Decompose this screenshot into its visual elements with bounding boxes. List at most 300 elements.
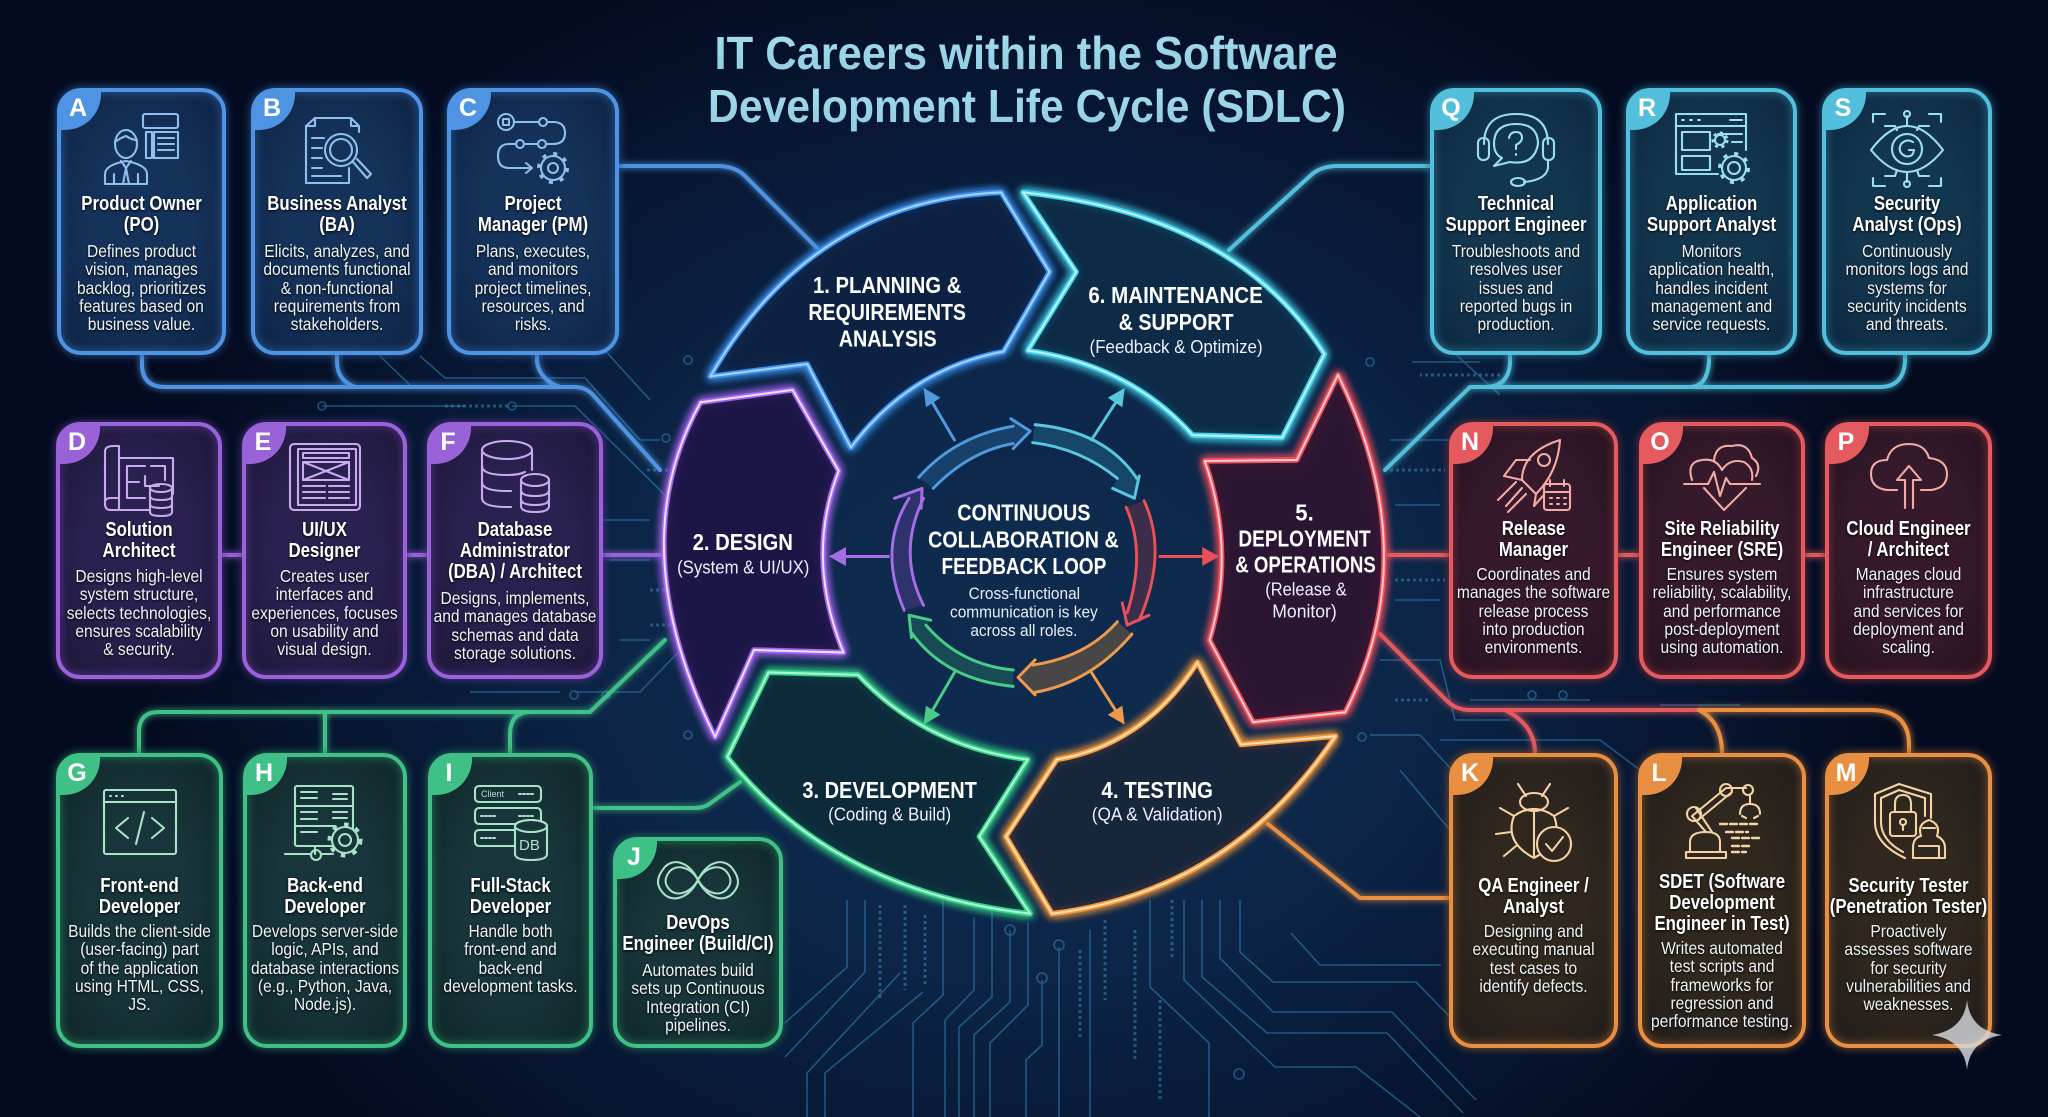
role title — [102, 518, 176, 562]
text — [76, 192, 207, 334]
role title: Engineer in Test) — [1654, 912, 1790, 935]
stage 6: maintenance and support — [1023, 192, 1324, 438]
icon: robot arm — [1682, 782, 1762, 862]
badge H: H — [255, 759, 273, 787]
card N: Release Manager — [1449, 422, 1618, 679]
role title — [80, 192, 203, 238]
badge S — [1825, 91, 1866, 130]
text — [443, 874, 578, 997]
role title: Front-end — [100, 874, 179, 897]
badge O — [1642, 425, 1683, 464]
role description: test cases to — [1490, 958, 1577, 978]
card D: Solution Architect — [56, 422, 222, 679]
role description: systems for — [1867, 278, 1947, 298]
card B: Business Analyst — [251, 88, 423, 355]
role description: experiences, focuses — [251, 603, 398, 623]
role description: regression and — [1670, 993, 1774, 1013]
role title — [266, 192, 408, 238]
role description — [631, 960, 765, 1036]
text — [1826, 193, 1988, 333]
role title: Site Reliability — [1665, 517, 1779, 540]
role title: (Penetration Tester) — [1830, 895, 1987, 918]
icon: devops infinity loop — [656, 861, 740, 900]
stage 2: design: (System & UI/UX) — [677, 556, 809, 577]
role description: Designs, implements, — [441, 588, 589, 608]
role title: Project — [505, 192, 561, 215]
role description: development tasks. — [443, 976, 578, 996]
text — [1642, 871, 1802, 1030]
role title — [478, 192, 589, 238]
role description: requirements from — [274, 296, 400, 316]
role description: reported bugs in — [1460, 296, 1572, 316]
role description — [76, 241, 207, 334]
role description: resolves user — [1470, 259, 1562, 279]
role description: identify defects. — [1479, 976, 1588, 996]
role description: service requests. — [1653, 314, 1770, 334]
badge E — [245, 425, 286, 464]
role description: back-end — [478, 958, 543, 978]
role description: issues and — [1479, 278, 1553, 298]
role description: test scripts and — [1670, 956, 1774, 976]
icon: eye monitoring — [1867, 108, 1947, 188]
stage 2: design — [664, 390, 844, 737]
role description — [1616, 565, 1828, 656]
role title — [448, 518, 583, 584]
role description — [1802, 565, 2015, 656]
text — [474, 192, 592, 334]
role description: (e.g., Python, Java, — [258, 976, 392, 996]
text — [66, 518, 211, 660]
badge K — [1452, 756, 1493, 795]
role title: Full-Stack — [470, 874, 551, 897]
card I: Full-Stack Developer — [428, 753, 593, 1048]
role description — [1603, 242, 1820, 333]
role description — [474, 241, 592, 334]
badge N: N — [1461, 428, 1479, 456]
role title: Back-end — [287, 874, 363, 897]
role title: Administrator — [460, 539, 570, 562]
role description — [250, 566, 398, 660]
text — [1453, 875, 1614, 995]
icon: stack and database — [474, 785, 548, 861]
role description: executing manual — [1472, 939, 1595, 959]
role title — [288, 518, 362, 564]
badge B: B — [263, 94, 281, 122]
icon: heart pulse cloud — [1682, 434, 1762, 514]
role description: monitors logs and — [1846, 259, 1968, 279]
badge D: D — [68, 428, 86, 456]
role description — [1426, 565, 1641, 656]
role title: Engineer (SRE) — [1661, 538, 1783, 561]
stage 3: development — [727, 672, 1030, 914]
role description: frameworks for — [1671, 975, 1773, 995]
role description: selects technologies, — [67, 603, 211, 623]
role description: manages the software — [1457, 582, 1610, 602]
badge A: A — [69, 94, 87, 122]
role description: management and — [1651, 296, 1772, 316]
role description: Plans, executes, — [476, 241, 590, 261]
role description: weaknesses. — [1863, 994, 1954, 1014]
text — [1643, 518, 1801, 656]
role title: SDET (Software — [1659, 870, 1785, 893]
text — [68, 874, 211, 1014]
role description — [1799, 242, 2015, 333]
role description: Ensures system — [1667, 564, 1777, 584]
role description: for security — [1870, 958, 1947, 978]
role description — [443, 921, 578, 997]
role description: handles incident — [1655, 278, 1768, 298]
role description: and services for — [1854, 601, 1963, 621]
stage 5: deployment and operations — [1205, 375, 1384, 722]
card J: DevOps Engineer — [613, 837, 783, 1048]
arrow: red loop — [1122, 501, 1155, 625]
arrow: green loop — [909, 615, 1013, 686]
text — [1829, 518, 1988, 656]
role title: Security Tester — [1848, 874, 1969, 897]
stage 6: maintenance and support: (Feedback & Optimize) — [1090, 336, 1263, 357]
arrow: orange loop — [1018, 622, 1132, 695]
badge E: E — [255, 428, 271, 456]
stage 5: deployment and operations: & OPERATIONS — [1235, 552, 1376, 577]
role description: and manages database — [434, 606, 596, 626]
role description: interfaces and — [276, 584, 373, 604]
badge L — [1641, 756, 1682, 795]
badge A — [60, 91, 101, 130]
role title: Release — [1502, 517, 1565, 540]
role title: Solution — [105, 518, 173, 541]
role description: stakeholders. — [291, 314, 383, 334]
role title: (DBA) / Architect — [448, 560, 582, 583]
badge J: J — [627, 843, 641, 871]
role title: Analyst — [1503, 895, 1564, 918]
role description: risks. — [515, 314, 551, 334]
role title: Database — [478, 518, 552, 541]
role description: project timelines, — [475, 278, 591, 298]
icon: process route with gear — [496, 113, 569, 184]
feedback loop arrows — [892, 419, 1155, 695]
badge B — [254, 91, 295, 130]
role description: Develops server-side — [252, 921, 398, 941]
role title: (PO) — [124, 213, 159, 236]
title: IT Careers within the Software — [714, 27, 1338, 79]
role description: security incidents — [1847, 296, 1967, 316]
role title: Technical — [1478, 192, 1554, 215]
icon: document magnifier — [304, 116, 372, 184]
role title: Developer — [99, 895, 180, 918]
card Q: Technical Support Engineer — [1430, 88, 1602, 355]
icon: bug with check — [1494, 782, 1574, 862]
role description: scaling. — [1882, 637, 1935, 657]
role title — [622, 911, 774, 956]
role description: database interactions — [251, 958, 399, 978]
role description: ensures scalability — [75, 621, 203, 641]
text — [1630, 193, 1793, 333]
role title — [1624, 871, 1820, 934]
text — [1453, 518, 1614, 656]
badge S: S — [1835, 94, 1851, 122]
role description: assesses software — [1844, 939, 1973, 959]
role description — [1426, 922, 1641, 995]
role description: vulnerabilities and — [1846, 976, 1971, 996]
card E: UI/UX Designer — [242, 422, 407, 679]
text — [250, 518, 398, 660]
role description: into production — [1482, 619, 1585, 639]
role title: QA Engineer / — [1478, 874, 1589, 897]
role description — [1615, 939, 1829, 1030]
role description: post-deployment — [1664, 619, 1780, 639]
role title: Developer — [470, 895, 551, 918]
role title — [1624, 518, 1820, 560]
role title — [1435, 875, 1632, 917]
card M: Security Tester — [1825, 753, 1992, 1048]
role title — [1435, 518, 1632, 560]
card K: QA Engineer — [1449, 753, 1618, 1048]
role title: Security — [1874, 192, 1940, 215]
role title: DevOps — [666, 911, 730, 934]
icon: tablet wireframe — [288, 443, 362, 511]
card R: Application Support Analyst — [1626, 88, 1797, 355]
icon: browser code — [102, 789, 178, 855]
text — [1829, 875, 1988, 1013]
role title: Support Engineer — [1445, 213, 1587, 236]
role title: UI/UX — [302, 518, 347, 541]
center text: continuous collaboration: communication is key — [950, 603, 1098, 622]
role title: / Architect — [1868, 538, 1949, 561]
badge K: K — [1461, 759, 1479, 787]
role description — [68, 921, 211, 1014]
badge G: G — [67, 759, 87, 787]
role description — [1802, 922, 2015, 1013]
role title: Product Owner — [81, 192, 202, 215]
stage 1: planning and requirements analysis: 1. PLANNING & — [813, 273, 961, 298]
badge C — [450, 91, 491, 130]
badge F — [430, 425, 471, 464]
center text: continuous collaboration: COLLABORATION & — [928, 527, 1119, 553]
role description: schemas and data — [451, 625, 579, 645]
role description: Node.js). — [294, 994, 356, 1014]
role description: logic, APIs, and — [271, 939, 379, 959]
role description — [250, 921, 400, 1015]
arrow: purple loop — [892, 488, 924, 610]
role description: Elicits, analyzes, and — [264, 241, 410, 261]
center text: continuous collaboration: Cross-functional — [969, 584, 1080, 603]
role title: Developer — [284, 895, 366, 918]
icon: cloud upload — [1868, 434, 1948, 514]
stage 2: design: 2. DESIGN — [693, 530, 793, 555]
role description: business value. — [88, 314, 195, 334]
badge G — [59, 756, 100, 795]
role description: Writes automated — [1661, 938, 1783, 958]
badge Q: Q — [1441, 94, 1461, 122]
role title: Cloud Engineer — [1846, 517, 1971, 540]
arrow: blue loop — [919, 419, 1030, 488]
stage 4: testing: (QA & Validation) — [1092, 803, 1223, 825]
card A: Product Owner — [57, 88, 226, 355]
role description: JS. — [128, 994, 151, 1014]
stage 5: deployment and operations: Monitor) — [1272, 600, 1337, 622]
badge R: R — [1638, 94, 1656, 122]
role description — [66, 566, 211, 660]
role description: Coordinates and — [1476, 564, 1591, 584]
role description: storage solutions. — [454, 643, 576, 663]
role title: Manager — [1499, 538, 1568, 561]
role title — [1808, 193, 2006, 235]
role title: Support Analyst — [1647, 213, 1776, 236]
icon: stack and database: Client — [480, 789, 504, 799]
center text: continuous collaboration: CONTINUOUS — [957, 500, 1091, 526]
badge I: I — [446, 759, 452, 787]
role description: using HTML, CSS, — [75, 976, 204, 996]
role description: Creates user — [280, 566, 369, 586]
center text: continuous collaboration — [928, 500, 1119, 640]
role title — [284, 874, 366, 919]
role description: and monitors — [488, 259, 578, 279]
role description: sets up Continuous — [631, 978, 765, 998]
role description: features based on — [79, 296, 204, 316]
badge F: F — [440, 428, 456, 456]
SDLC cycle ring — [664, 192, 1384, 914]
stage 6: maintenance and support: & SUPPORT — [1119, 310, 1234, 335]
arrow: cyan loop — [1033, 425, 1139, 498]
role description — [433, 588, 597, 665]
title — [708, 27, 1346, 132]
badge J — [616, 840, 657, 879]
icon: headset question — [1476, 108, 1556, 188]
stage 4: testing — [1006, 662, 1336, 914]
icon: rocket and calendar — [1494, 434, 1574, 514]
icon: blueprint and database — [104, 445, 174, 517]
icon: shield, lock, hacker — [1868, 782, 1948, 862]
stage 5: deployment and operations: (Release & — [1265, 578, 1347, 599]
role title: Engineer (Build/CI) — [622, 932, 774, 955]
role title: (BA) — [319, 213, 355, 236]
card H: Back-end Developer — [243, 753, 407, 1048]
card S: Security Analyst — [1822, 88, 1992, 355]
role description: Continuously — [1862, 241, 1952, 261]
text — [250, 874, 400, 1015]
stage 5: deployment and operations: 5. — [1295, 500, 1314, 526]
badge O: O — [1650, 428, 1670, 456]
card L: SDET — [1638, 753, 1806, 1048]
icon: app window gear — [1672, 108, 1752, 188]
role description: (user-facing) part — [80, 939, 199, 959]
radial arrows — [829, 388, 1219, 725]
role title: Development — [1669, 891, 1775, 914]
stage 1: planning and requirements analysis: REQUIREMENTS — [808, 300, 966, 325]
role description: Designing and — [1484, 921, 1583, 941]
role description: on usability and — [270, 621, 379, 641]
center text: continuous collaboration: across all roles. — [970, 621, 1077, 640]
role description: backlog, prioritizes — [77, 278, 206, 298]
stage 5: deployment and operations: DEPLOYMENT — [1238, 526, 1371, 552]
role title: Business Analyst — [267, 192, 407, 215]
role description: & non-functional — [281, 278, 393, 298]
role description: Defines product — [87, 241, 196, 261]
icon: product owner — [104, 113, 180, 186]
role title — [1416, 193, 1616, 235]
badge I — [431, 756, 472, 795]
role description: vision, manages — [85, 259, 198, 279]
badge Q — [1433, 91, 1474, 130]
badge P — [1828, 425, 1869, 464]
role description: Manages cloud — [1856, 564, 1961, 584]
role description: and threats. — [1866, 314, 1948, 334]
card C: Project Manager — [447, 88, 619, 355]
badge L: L — [1651, 759, 1667, 787]
role description: system structure, — [80, 584, 198, 604]
role description: Troubleshoots and — [1452, 241, 1580, 261]
role description: Proactively — [1870, 921, 1947, 941]
role description: Integration (CI) — [646, 997, 750, 1017]
connectors — [139, 166, 1909, 898]
text — [262, 192, 411, 334]
role title: Manager (PM) — [478, 213, 588, 236]
stage 3: development: (Coding & Build) — [828, 803, 951, 825]
title: Development Life Cycle (SDLC) — [708, 80, 1346, 132]
stage 1: planning and requirements analysis — [710, 192, 1050, 448]
badge M: M — [1836, 759, 1856, 787]
role description: pipelines. — [665, 1015, 731, 1035]
role description: reliability, scalability, — [1653, 582, 1791, 602]
role title — [470, 874, 552, 919]
role title: Designer — [289, 539, 360, 562]
icon: server and gear — [284, 785, 362, 861]
icon: stack and database: DB — [518, 837, 539, 854]
role description: environments. — [1485, 637, 1582, 657]
role title: Architect — [103, 539, 175, 562]
card P: Cloud Engineer — [1825, 422, 1992, 679]
text — [433, 518, 597, 665]
role description: & security. — [103, 639, 175, 659]
role description: infrastructure — [1863, 582, 1954, 602]
role title: Analyst (Ops) — [1852, 213, 1962, 236]
role description: front-end and — [464, 939, 557, 959]
role description: of the application — [81, 958, 198, 978]
role description: resources, and — [481, 296, 585, 316]
role description: deployment and — [1853, 619, 1964, 639]
role title — [1811, 518, 2006, 560]
role description: production. — [1477, 314, 1555, 334]
badge M — [1828, 756, 1869, 795]
role description: Monitors — [1682, 241, 1741, 261]
role description — [262, 241, 411, 334]
role title — [98, 874, 181, 919]
badge H — [246, 756, 287, 795]
stage 4: testing: 4. TESTING — [1101, 778, 1213, 803]
role title — [1811, 875, 2006, 917]
text — [622, 911, 774, 1036]
role description: Automates build — [642, 960, 754, 980]
sparkle watermark — [1932, 1000, 2002, 1070]
icon: database cylinders — [480, 440, 550, 513]
role title — [1612, 193, 1811, 235]
role description: Handle both — [468, 921, 552, 941]
role description — [1407, 242, 1625, 333]
badge D — [59, 425, 100, 464]
role description: and performance — [1663, 601, 1781, 621]
text — [1434, 193, 1598, 333]
badge N — [1452, 425, 1493, 464]
card O: Site Reliability Engineer — [1639, 422, 1805, 679]
badge P: P — [1838, 428, 1854, 456]
stage 6: maintenance and support: 6. MAINTENANCE — [1088, 283, 1263, 308]
badge R — [1629, 91, 1670, 130]
role description: documents functional — [263, 259, 411, 279]
role description: visual design. — [277, 639, 372, 659]
stage 3: development: 3. DEVELOPMENT — [802, 778, 977, 803]
card F: Database Administrator — [427, 422, 603, 679]
role description: Designs high-level — [75, 566, 203, 586]
